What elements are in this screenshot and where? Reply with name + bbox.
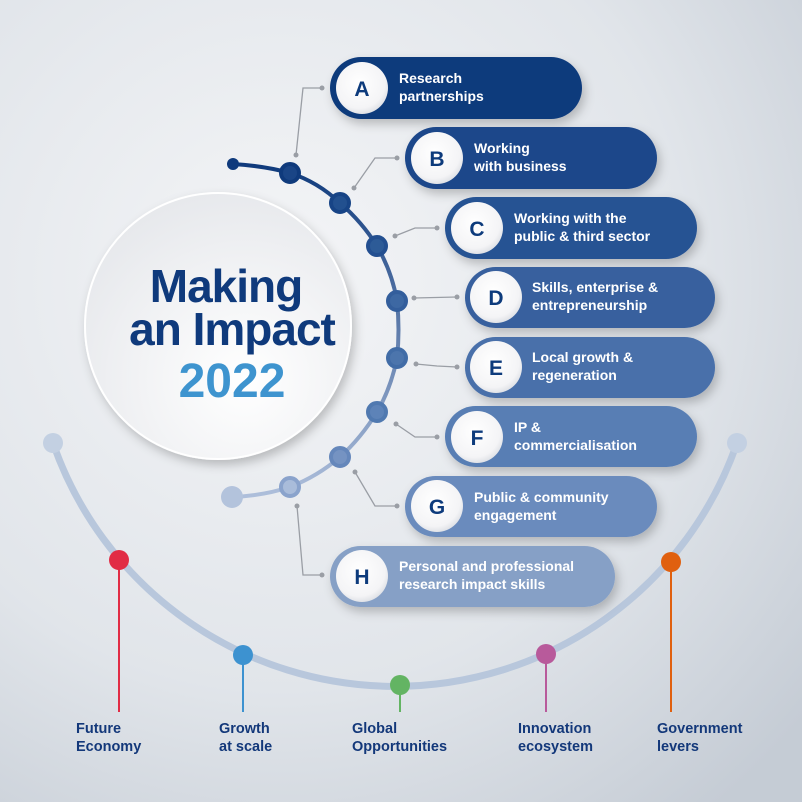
title: Making bbox=[150, 260, 302, 312]
bottom labels: at scale bbox=[219, 739, 272, 755]
bottom labels: Opportunities bbox=[352, 739, 447, 755]
pill F: commercialisation bbox=[514, 437, 637, 453]
bottom arc bbox=[43, 433, 747, 686]
node arc bbox=[221, 158, 406, 508]
pill E: regeneration bbox=[532, 367, 617, 383]
bottom labels: ecosystem bbox=[518, 739, 593, 755]
pill A: partnerships bbox=[399, 88, 484, 104]
pill E: Local growth & bbox=[532, 349, 633, 365]
bottom labels: levers bbox=[657, 739, 699, 755]
title: 2022 bbox=[179, 355, 285, 408]
marker: Innovation ecosystem bbox=[536, 644, 556, 712]
pill D: entrepreneurship bbox=[532, 297, 647, 313]
marker: Growth at scale bbox=[233, 645, 253, 712]
pill G: engagement bbox=[474, 507, 557, 523]
pill A: Research bbox=[399, 70, 462, 86]
title: an Impact bbox=[129, 303, 336, 355]
connector lines bbox=[296, 88, 457, 575]
pill D bbox=[465, 267, 715, 328]
pill C: C bbox=[469, 218, 485, 241]
pill F: IP & bbox=[514, 419, 541, 435]
marker: Government levers bbox=[661, 552, 681, 712]
pill E: E bbox=[489, 357, 503, 380]
bottom labels: Government bbox=[657, 721, 743, 737]
bottom labels: Future bbox=[76, 721, 121, 737]
pill G: G bbox=[429, 496, 445, 519]
pill H bbox=[330, 546, 615, 607]
pill A bbox=[330, 57, 582, 119]
pill D: D bbox=[488, 287, 504, 310]
big title circle bbox=[85, 193, 351, 459]
pill B: Working bbox=[474, 140, 530, 156]
marker: Future Economy bbox=[109, 550, 129, 712]
pill E bbox=[465, 337, 715, 398]
pill C: Working with the bbox=[514, 210, 627, 226]
marker: Global Opportunities bbox=[390, 675, 410, 712]
pill F bbox=[445, 406, 697, 467]
pill B bbox=[405, 127, 657, 189]
pill B: with business bbox=[473, 158, 567, 174]
pill G bbox=[405, 476, 657, 537]
pill A: A bbox=[354, 78, 370, 101]
pill D: Skills, enterprise & bbox=[532, 279, 658, 295]
pill G: Public & community bbox=[474, 489, 609, 505]
pill C bbox=[445, 197, 697, 259]
title bbox=[129, 260, 336, 408]
pill H: Personal and professional bbox=[399, 558, 574, 574]
pill B: B bbox=[429, 148, 445, 171]
bottom labels bbox=[76, 721, 743, 755]
bottom labels: Economy bbox=[76, 739, 141, 755]
pill F: F bbox=[471, 427, 484, 450]
pill H: H bbox=[354, 566, 370, 589]
pill C: public & third sector bbox=[514, 228, 651, 244]
bottom labels: Global bbox=[352, 721, 397, 737]
bottom labels: Innovation bbox=[518, 721, 591, 737]
pill H: research impact skills bbox=[399, 576, 546, 592]
bottom labels: Growth bbox=[219, 721, 270, 737]
